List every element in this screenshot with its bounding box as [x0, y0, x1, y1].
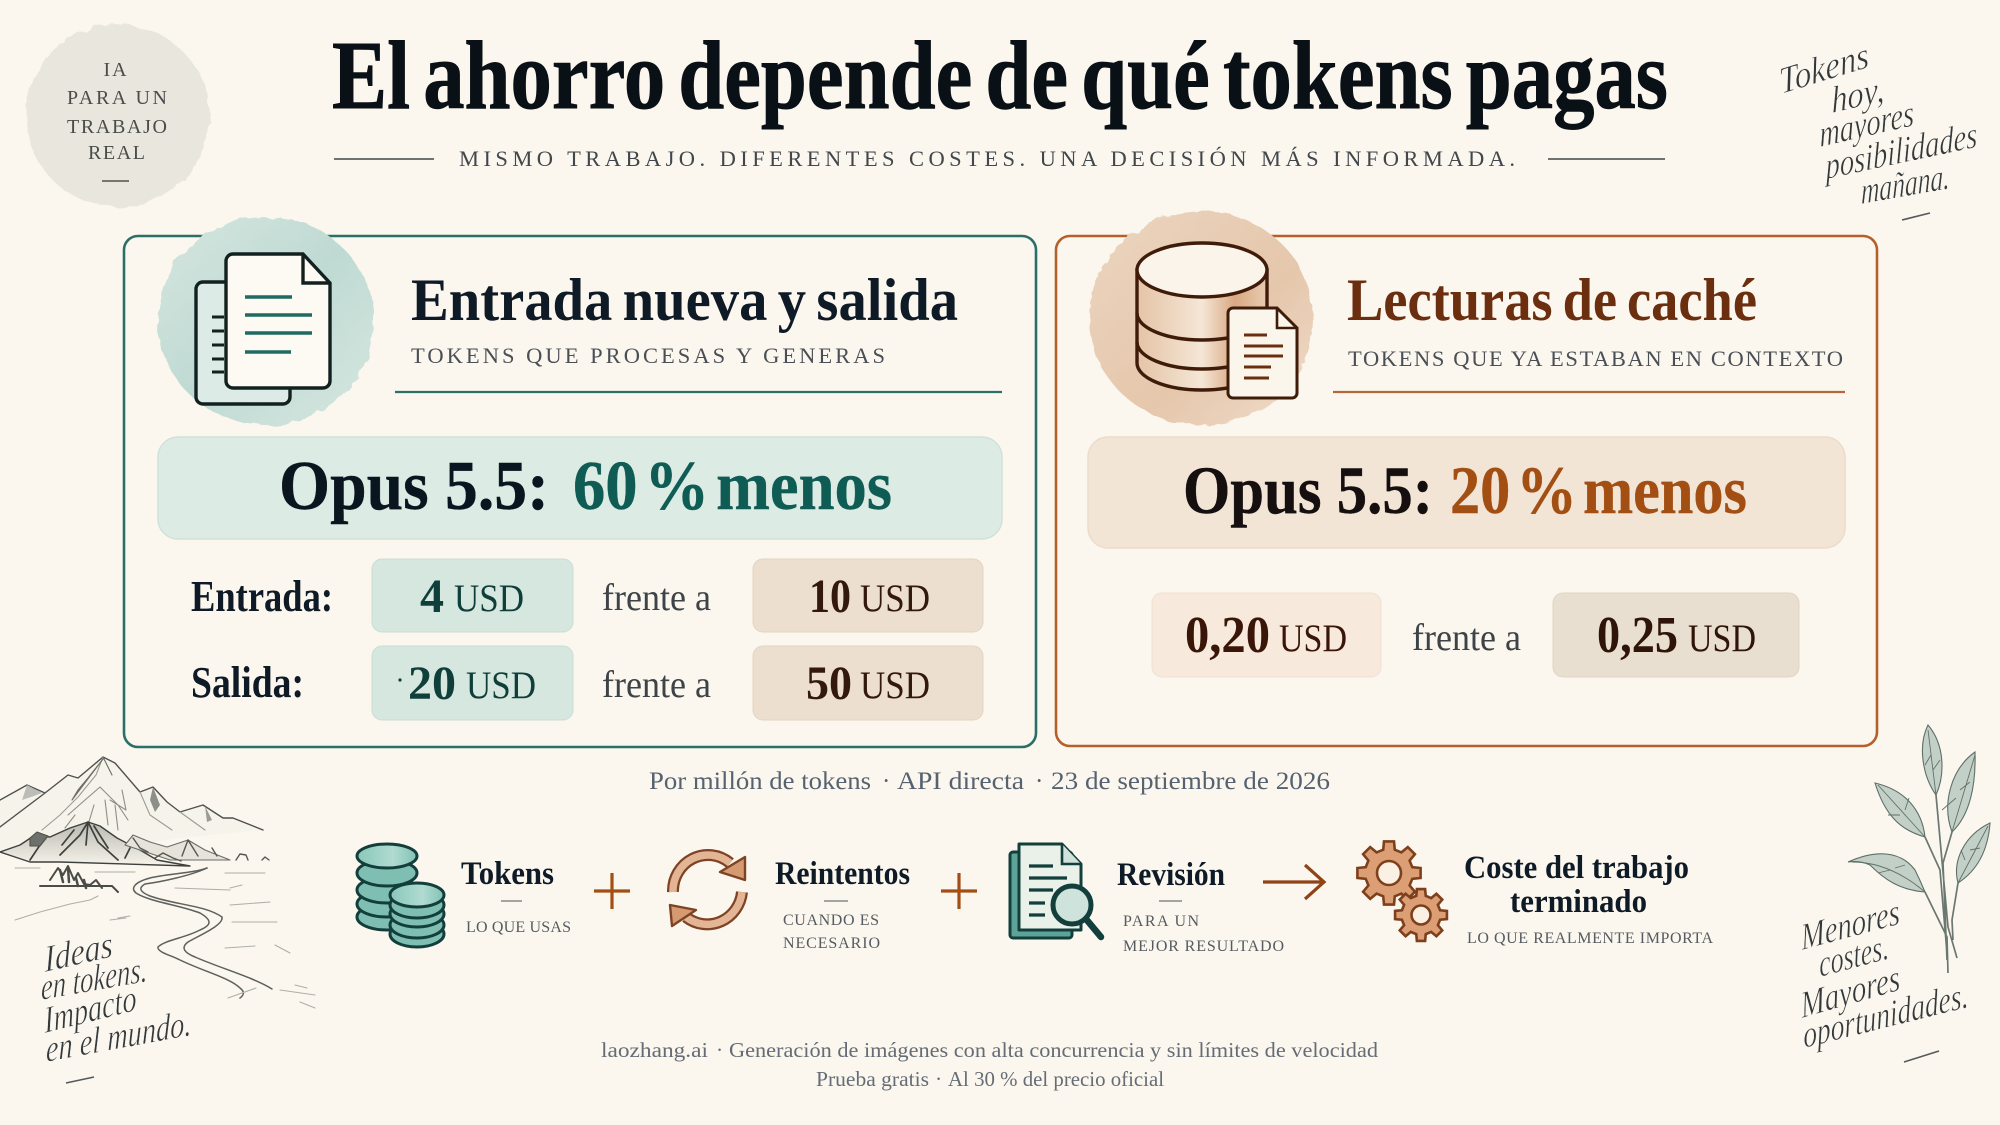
badge: IA para un trabajo real: REAL	[88, 142, 145, 164]
handwritten note: bottom left: Impacto	[42, 978, 138, 1042]
flow: coste del trabajo terminado: LO QUE REALMENTE IMPORTA	[1467, 930, 1713, 947]
footer: Al 30 % del precio oficial	[948, 1067, 1164, 1091]
badge: IA para un trabajo real: PARA UN	[67, 87, 167, 109]
badge: IA para un trabajo real: TRABAJO	[67, 116, 167, 138]
handwritten note: bottom right: Menores	[1798, 891, 1901, 959]
icon: database and document on orange watercolour	[1089, 211, 1313, 425]
badge: IA para un trabajo real	[26, 25, 210, 207]
handwritten note: bottom right: Mayores	[1798, 958, 1902, 1027]
price comparison: USD	[1688, 617, 1756, 660]
flow: coste del trabajo terminado	[1357, 841, 1713, 947]
flow: tokens: Tokens	[461, 856, 554, 892]
savings band	[158, 437, 1002, 539]
caption: ·	[882, 768, 890, 795]
badge: IA para un trabajo real: IA	[103, 59, 129, 81]
row: entrada: 4	[420, 570, 444, 623]
caption	[649, 768, 1330, 795]
savings band: 60 % menos	[573, 448, 892, 525]
flow: reintentos	[670, 855, 910, 952]
footer	[601, 1038, 1378, 1091]
row: entrada: USD	[860, 577, 930, 620]
caption: API directa	[897, 768, 1024, 795]
savings band: Opus 5.5:	[279, 448, 549, 525]
handwritten note: bottom left	[41, 924, 192, 1083]
flow: coste del trabajo terminado: Coste del trabajo	[1464, 850, 1689, 886]
handwritten note: top right: mayores	[1818, 93, 1915, 156]
savings band	[1088, 437, 1845, 548]
subheading: TOKENS QUE PROCESAS Y GENERAS	[411, 343, 885, 368]
icon: plus	[594, 873, 630, 909]
row: salida: 50	[806, 657, 852, 710]
arrow	[1263, 865, 1324, 899]
footer: ·	[716, 1038, 723, 1062]
savings band: Opus 5.5:	[1183, 452, 1433, 528]
icon: refresh arrows	[670, 855, 745, 926]
row: entrada: 10	[809, 570, 851, 623]
row: entrada: Entrada:	[191, 572, 333, 621]
handwritten note: bottom left: en tokens.	[41, 949, 147, 1009]
heading: Entrada nueva y salida	[411, 267, 958, 333]
price comparison: frente a	[1412, 617, 1521, 659]
icon: plus	[941, 873, 977, 909]
row: salida: 20	[408, 657, 456, 710]
handwritten note: bottom left: en el mundo.	[46, 1003, 192, 1071]
flow: revisión: MEJOR RESULTADO	[1123, 938, 1284, 955]
flow: reintentos: CUANDO ES	[783, 912, 879, 929]
panel: entrada nueva y salida	[124, 217, 1036, 747]
row: salida: frente a	[602, 664, 711, 706]
row: entrada: USD	[454, 577, 524, 620]
flow: revisión	[1010, 844, 1284, 955]
flow: revisión: PARA UN	[1123, 913, 1199, 930]
price comparison: USD	[1279, 617, 1347, 660]
row: entrada: frente a	[602, 577, 711, 619]
flow: coste del trabajo terminado: terminado	[1510, 884, 1647, 920]
price comparison: 0,20	[1185, 607, 1270, 664]
subheading: TOKENS QUE YA ESTABAN EN CONTEXTO	[1348, 346, 1843, 371]
footer: Prueba gratis	[816, 1067, 929, 1091]
handwritten note: top right: mañana.	[1861, 156, 1950, 213]
flow: reintentos: Reintentos	[775, 856, 910, 892]
caption: Por millón de tokens	[649, 768, 871, 795]
row: salida: Salida:	[191, 658, 304, 707]
price comparison	[1152, 593, 1799, 677]
illustration: mountain landscape	[0, 757, 315, 1008]
handwritten note: bottom right: costes.	[1817, 926, 1890, 986]
icon: documents on teal watercolour	[158, 217, 374, 425]
flow: revisión: Revisión	[1117, 857, 1225, 893]
subtitle: MISMO TRABAJO. DIFERENTES COSTES. UNA DECISIÓN MÁS INFORMADA.	[459, 145, 1515, 171]
caption: ·	[1035, 768, 1043, 795]
icon: coin stacks	[357, 844, 444, 947]
icon: gears	[1357, 841, 1447, 941]
flow: tokens: LO QUE USAS	[466, 919, 571, 936]
handwritten note: top right	[1777, 35, 1978, 220]
row: salida: USD	[860, 664, 930, 707]
flow: tokens	[357, 844, 571, 947]
row: salida: USD	[466, 664, 536, 707]
title: El ahorro depende de qué tokens pagas	[332, 22, 1668, 130]
caption: 23 de septiembre de 2026	[1051, 768, 1330, 795]
handwritten note: bottom right	[1798, 891, 1970, 1062]
panel: lecturas de caché	[1056, 211, 1877, 746]
savings band: 20 % menos	[1450, 452, 1747, 528]
footer: ·	[935, 1067, 942, 1091]
handwritten note: top right: hoy,	[1830, 69, 1885, 122]
footer: laozhang.ai	[601, 1038, 708, 1062]
row: salida	[191, 646, 983, 720]
illustration: plant	[1848, 725, 1990, 973]
footer: Generación de imágenes con alta concurrencia y sin límites de velocidad	[729, 1038, 1378, 1062]
row: entrada	[191, 559, 983, 632]
price comparison: 0,25	[1597, 607, 1678, 664]
handwritten note: top right: Tokens	[1777, 35, 1871, 103]
handwritten note: bottom left: Ideas	[42, 924, 114, 981]
icon: document with magnifier	[1010, 844, 1101, 938]
flow: reintentos: NECESARIO	[783, 935, 880, 952]
heading: Lecturas de caché	[1347, 267, 1757, 333]
